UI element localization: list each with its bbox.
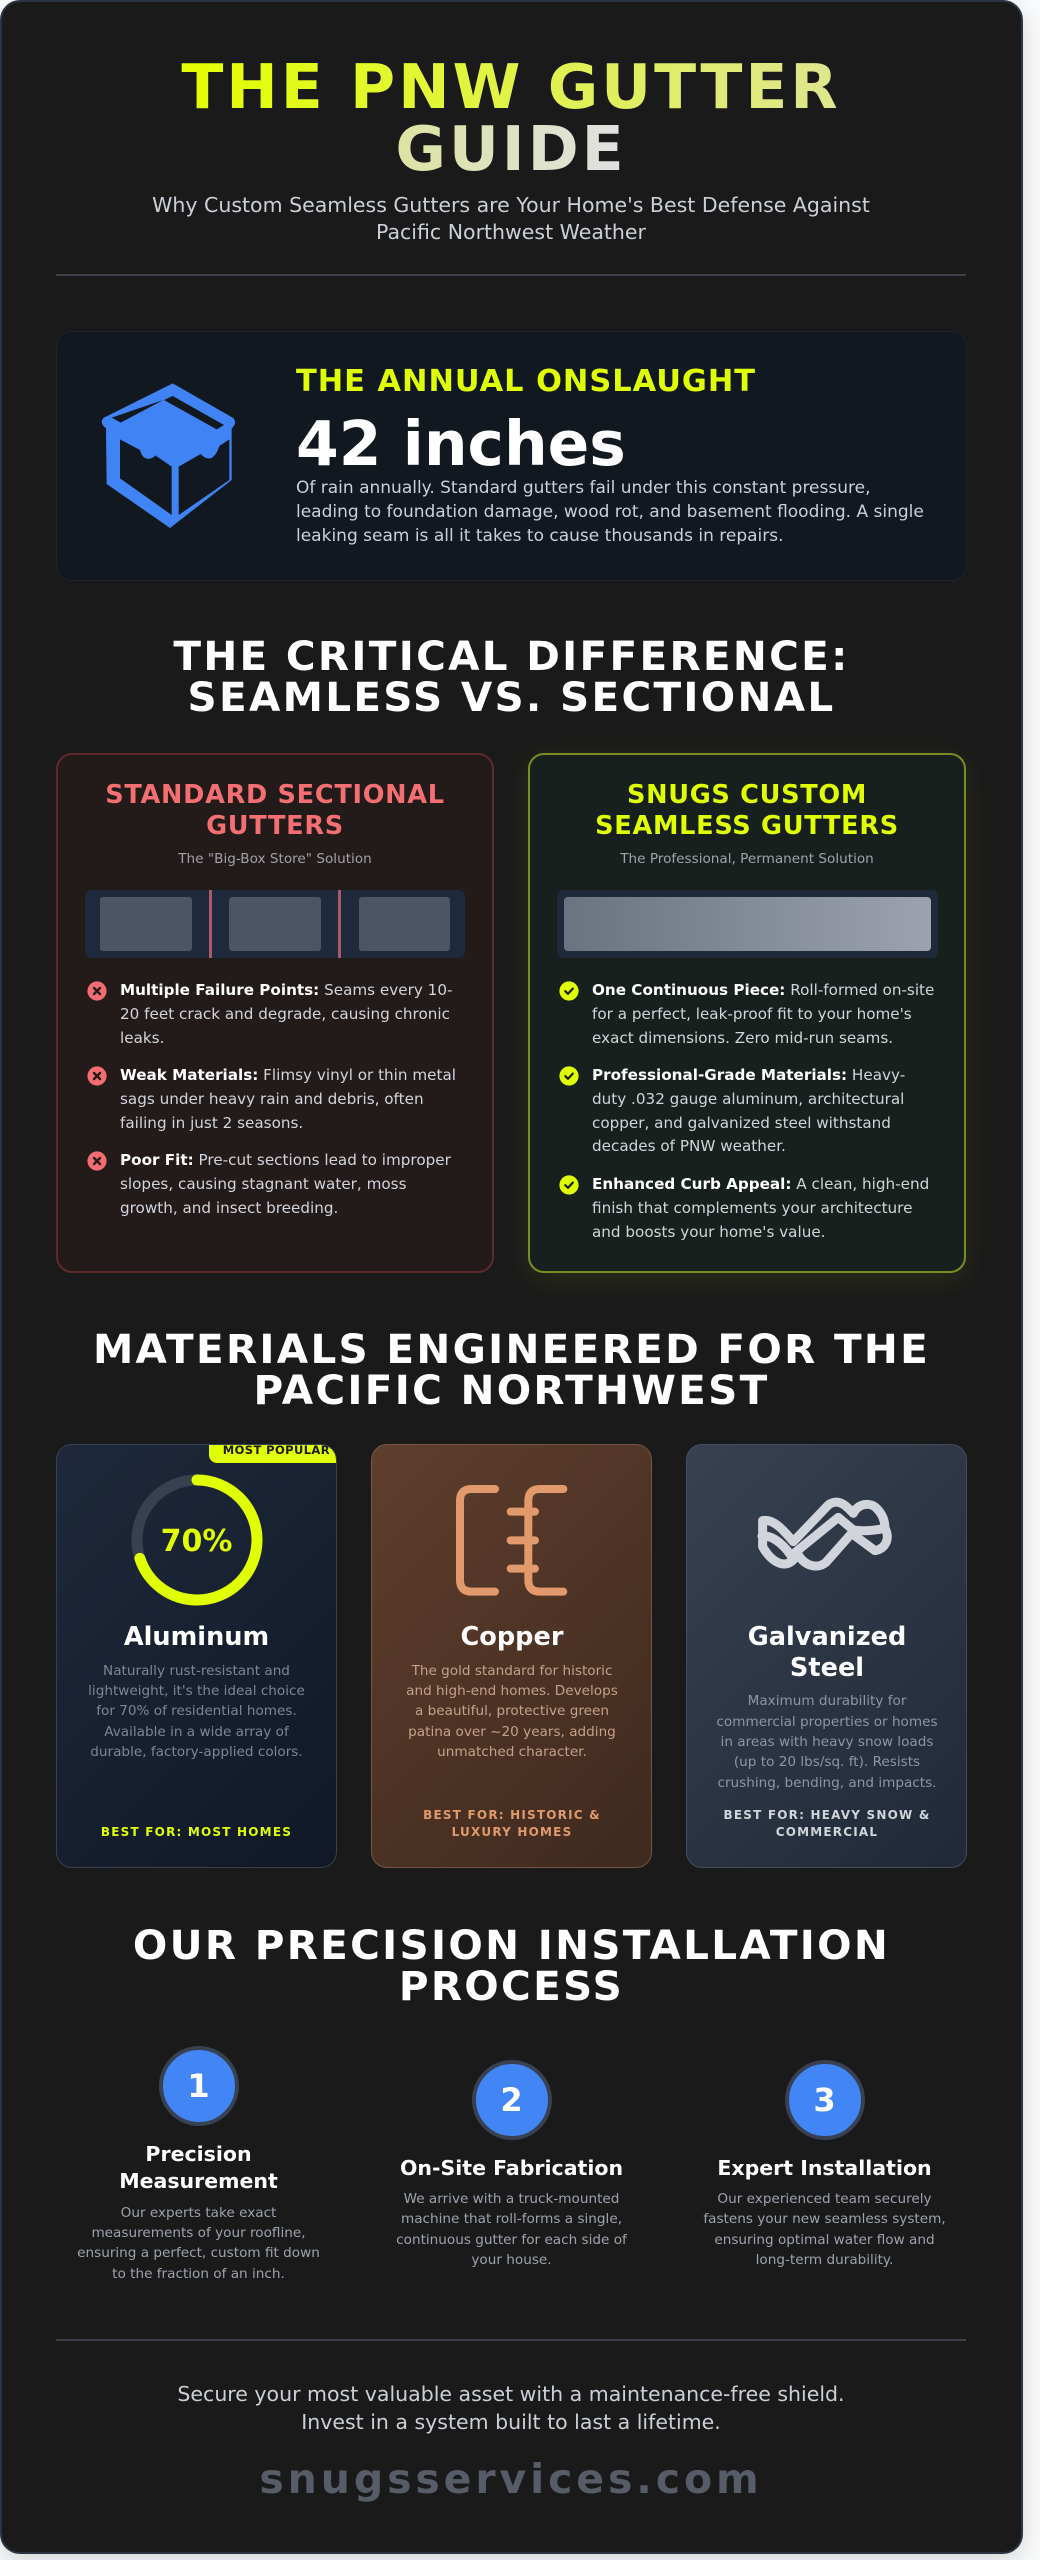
failure point 3: Poor Fit: Pre-cut sections lead to improper xyxy=(120,1151,451,1169)
failure point 3: growth, and insect breeding. xyxy=(120,1199,338,1217)
benefit 1: for a perfect, leak-proof fit to your home's xyxy=(592,1005,912,1023)
step 1 title: Precision xyxy=(145,2142,252,2166)
benefit 1: One Continuous Piece: Roll-formed on-site xyxy=(592,981,934,999)
step 3 number: 3 xyxy=(813,2081,836,2119)
heading: installation process xyxy=(133,1920,890,2010)
step 1 description xyxy=(77,2204,320,2282)
footer message: Secure your most valuable asset with a maintenance-free shield. xyxy=(177,2382,845,2406)
aluminum description: Available in a wide array of xyxy=(104,1724,289,1740)
aluminum best for: BEST FOR: MOST HOMES xyxy=(101,1825,292,1839)
step 2 description: continuous gutter for each side of xyxy=(396,2232,627,2248)
steel description: Maximum durability for xyxy=(748,1693,906,1709)
heading: installation process: OUR PRECISION INSTALLATION xyxy=(133,1920,890,1968)
failure point 2: sags under heavy rain and debris, often xyxy=(120,1090,424,1108)
sectional heading xyxy=(105,780,445,841)
steel name: Steel xyxy=(790,1653,864,1683)
aluminum description: Naturally rust-resistant and xyxy=(103,1663,290,1679)
failure point 1 xyxy=(87,981,452,1047)
heading: installation process: PROCESS xyxy=(399,1962,624,2010)
failure point 2: Weak Materials: Flimsy vinyl or thin metal xyxy=(120,1066,456,1084)
copper best for: LUXURY HOMES xyxy=(452,1825,572,1839)
copper best for xyxy=(423,1808,601,1839)
copper description xyxy=(406,1663,618,1760)
aluminum description xyxy=(88,1663,305,1760)
panel: annual onslaught xyxy=(56,331,967,581)
hero body text: leaking seam is all it takes to cause thousands in repairs. xyxy=(296,526,784,546)
step 2 number xyxy=(472,2060,552,2140)
card: aluminum xyxy=(56,1444,337,1868)
donut chart 70% xyxy=(132,1474,262,1606)
step 3 title: Expert Installation xyxy=(717,2156,932,2180)
step 1 description: ensuring a perfect, custom fit down xyxy=(77,2245,320,2261)
benefit 1 xyxy=(559,981,934,1047)
failure point 3: slopes, causing stagnant water, moss xyxy=(120,1175,406,1193)
benefit 2: decades of PNW weather. xyxy=(592,1137,786,1155)
failure point 2: failing in just 2 seasons. xyxy=(120,1114,303,1132)
seamless heading: SNUGS CUSTOM xyxy=(627,780,867,810)
step 1 xyxy=(77,2046,320,2282)
failure point 1: leaks. xyxy=(120,1029,164,1047)
failure point 3 xyxy=(87,1151,451,1217)
benefit 3: Enhanced Curb Appeal: A clean, high-end xyxy=(592,1175,929,1193)
benefit 2: duty .032 gauge aluminum, architectural xyxy=(592,1090,904,1108)
subtitle: Pacific Northwest Weather xyxy=(376,220,646,244)
sectional gutter diagram xyxy=(85,890,465,958)
footer message xyxy=(177,2382,845,2434)
sectional subheading: The "Big-Box Store" Solution xyxy=(178,851,372,867)
hero label: THE ANNUAL ONSLAUGHT xyxy=(296,364,756,399)
step 3 xyxy=(703,2060,946,2268)
step 2 number: 2 xyxy=(500,2081,523,2119)
step 1 number xyxy=(158,2046,238,2126)
title xyxy=(181,51,841,185)
step 3 description: long-term durability. xyxy=(756,2252,893,2268)
icon: copper brackets xyxy=(456,1485,568,1596)
aluminum description: lightweight, it's the ideal choice xyxy=(88,1683,305,1699)
steel description: in areas with heavy snow loads xyxy=(721,1734,933,1750)
title: GUIDE xyxy=(395,113,627,185)
seamless heading: SEAMLESS GUTTERS xyxy=(595,811,899,841)
benefit 1: exact dimensions. Zero mid-run seams. xyxy=(592,1029,893,1047)
steel best for xyxy=(724,1808,930,1839)
panel: snugs custom seamless gutters xyxy=(528,753,966,1273)
steel description: commercial properties or homes xyxy=(716,1714,938,1730)
most popular badge xyxy=(209,1445,336,1463)
card: galvanized steel xyxy=(686,1444,967,1868)
heading: materials: MATERIALS ENGINEERED FOR THE xyxy=(93,1324,930,1372)
step 2 description: your house. xyxy=(471,2252,552,2268)
step 2 description xyxy=(396,2191,628,2268)
step 3 description: Our experienced team securely xyxy=(717,2191,932,2207)
step 3 description xyxy=(703,2191,946,2268)
benefit 3: finish that complements your architecture xyxy=(592,1199,912,1217)
step 3 description: ensuring optimal water flow and xyxy=(714,2232,935,2248)
footer website: snugsservices.com xyxy=(259,2454,763,2502)
copper best for: BEST FOR: HISTORIC & xyxy=(423,1808,601,1822)
subtitle: Why Custom Seamless Gutters are Your Home's Best Defense Against xyxy=(152,193,870,217)
card: copper xyxy=(371,1444,652,1868)
panel: standard sectional gutters xyxy=(56,753,494,1273)
step 1 description: to the fraction of an inch. xyxy=(112,2266,285,2282)
step 2 title: On-Site Fabrication xyxy=(400,2156,623,2180)
benefit 2: copper, and galvanized steel withstand xyxy=(592,1114,891,1132)
icon: galvanized waves xyxy=(758,1498,892,1570)
heading: critical difference: SEAMLESS VS. SECTIONAL xyxy=(188,673,835,721)
subtitle xyxy=(152,193,870,244)
copper description: The gold standard for historic xyxy=(412,1663,612,1679)
step 1 number: 1 xyxy=(187,2067,210,2105)
heading: critical difference xyxy=(173,632,850,721)
failure point 2 xyxy=(87,1066,456,1132)
failure point 1: 20 feet crack and degrade, causing chronic xyxy=(120,1005,450,1023)
title: THE PNW GUTTER xyxy=(181,51,841,123)
donut value: 70% xyxy=(161,1524,232,1558)
icon: overflowing gutter box xyxy=(102,383,236,528)
step 2 xyxy=(396,2060,628,2268)
step 2 description: We arrive with a truck-mounted xyxy=(404,2191,619,2207)
aluminum description: for 70% of residential homes. xyxy=(96,1703,297,1719)
sectional heading: GUTTERS xyxy=(206,811,344,841)
copper name: Copper xyxy=(460,1622,564,1652)
heading: critical difference: THE CRITICAL DIFFERENCE: xyxy=(173,632,850,680)
steel description xyxy=(716,1693,938,1791)
heading: materials xyxy=(93,1324,930,1414)
step 1 description: measurements of your roofline, xyxy=(91,2225,306,2241)
hero body text xyxy=(296,478,924,546)
benefit 2: Professional-Grade Materials: Heavy- xyxy=(592,1066,905,1084)
footer message: Invest in a system built to last a lifetime. xyxy=(301,2410,721,2434)
sectional heading: STANDARD SECTIONAL xyxy=(105,780,445,810)
step 1 description: Our experts take exact xyxy=(121,2204,276,2220)
aluminum description: durable, factory-applied colors. xyxy=(90,1744,303,1760)
benefit 3: and boosts your home's value. xyxy=(592,1223,826,1241)
aluminum name: Aluminum xyxy=(124,1622,269,1652)
step 2 description: machine that roll-forms a single, xyxy=(401,2211,622,2227)
steel best for: BEST FOR: HEAVY SNOW & xyxy=(724,1808,930,1822)
seamless heading xyxy=(595,780,899,841)
copper description: and high-end homes. Develops xyxy=(406,1683,618,1699)
step 1 title: Measurement xyxy=(119,2169,278,2193)
hero body text: leading to foundation damage, wood rot, and basement flooding. A single xyxy=(296,502,924,522)
copper description: unmatched character. xyxy=(437,1744,587,1760)
steel description: (up to 20 lbs/sq. ft). Resists xyxy=(734,1754,920,1770)
benefit 3 xyxy=(559,1175,929,1241)
step 1 title xyxy=(119,2142,278,2193)
seamless subheading: The Professional, Permanent Solution xyxy=(620,851,874,867)
copper description: a beautiful, protective green xyxy=(415,1703,609,1719)
heading: materials: PACIFIC NORTHWEST xyxy=(253,1366,770,1414)
steel description: crushing, bending, and impacts. xyxy=(717,1775,937,1791)
steel name xyxy=(748,1622,906,1683)
step 3 description: fastens your new seamless system, xyxy=(703,2211,946,2227)
seamless gutter diagram xyxy=(557,890,938,958)
hero body text: Of rain annually. Standard gutters fail under this constant pressure, xyxy=(296,478,870,498)
step 3 number xyxy=(784,2060,864,2140)
big stat: 42 inches: 42 inches xyxy=(296,409,626,480)
failure point 1: Multiple Failure Points: Seams every 10- xyxy=(120,981,452,999)
copper description: patina over ~20 years, adding xyxy=(408,1724,616,1740)
steel name: Galvanized xyxy=(748,1622,906,1652)
benefit 2 xyxy=(559,1066,905,1155)
steel best for: COMMERCIAL xyxy=(776,1825,878,1839)
